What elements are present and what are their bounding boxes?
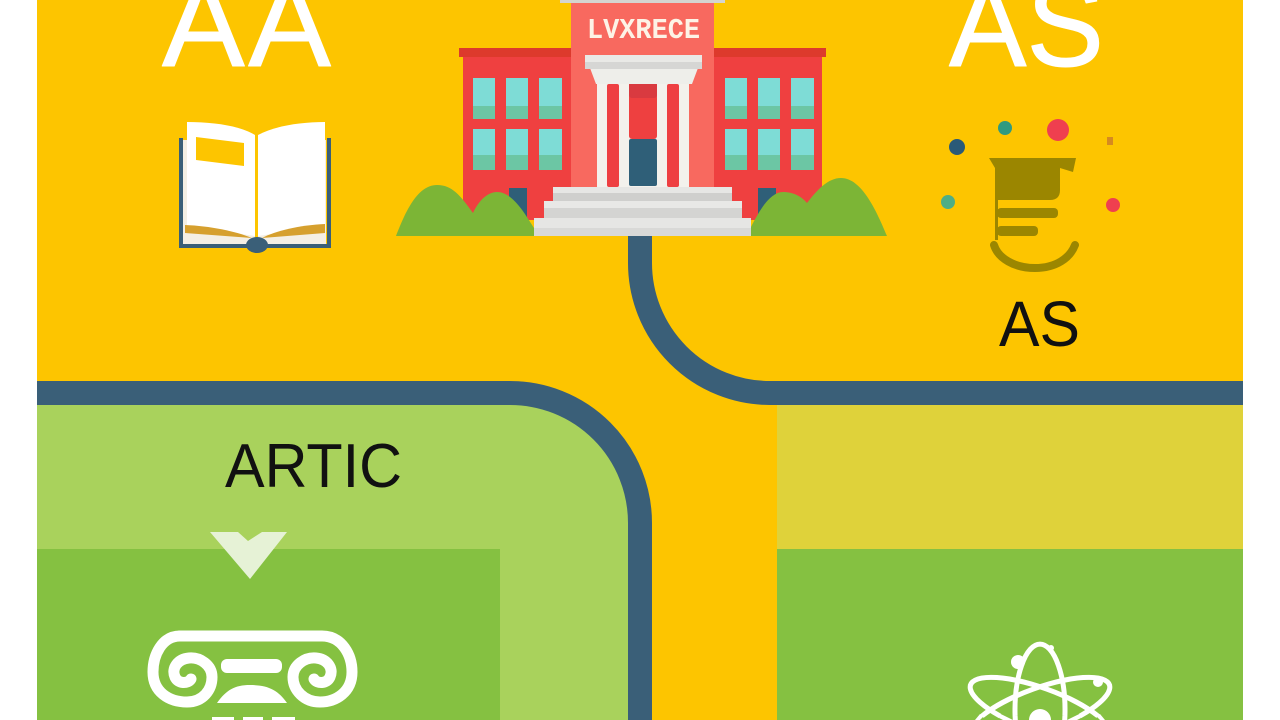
building: central tower — [560, 0, 725, 195]
portico: pediment and columns — [585, 55, 702, 188]
icon: science beaker with dots — [941, 119, 1120, 268]
icon: school building — [396, 0, 887, 236]
icon: open book — [179, 122, 331, 253]
bushes: left — [396, 185, 534, 236]
icon: down arrow — [210, 532, 287, 579]
path: left branch to arts — [37, 393, 652, 720]
panel: arts green area — [37, 393, 640, 720]
sign: building name: LVXRECE — [587, 14, 700, 47]
label: AS: AS — [999, 288, 1080, 360]
panel: sciences green area — [777, 393, 1243, 720]
label: ARTIC: ARTIC — [225, 432, 402, 501]
building: left wing — [459, 48, 573, 220]
portico: steps — [534, 187, 751, 236]
bushes: right — [751, 178, 887, 236]
path: right branch to sciences — [640, 230, 1243, 393]
building: right wing — [712, 48, 826, 220]
icon: ionic column capital — [153, 636, 352, 720]
building: windows — [473, 78, 814, 170]
icon: atom — [970, 644, 1110, 720]
